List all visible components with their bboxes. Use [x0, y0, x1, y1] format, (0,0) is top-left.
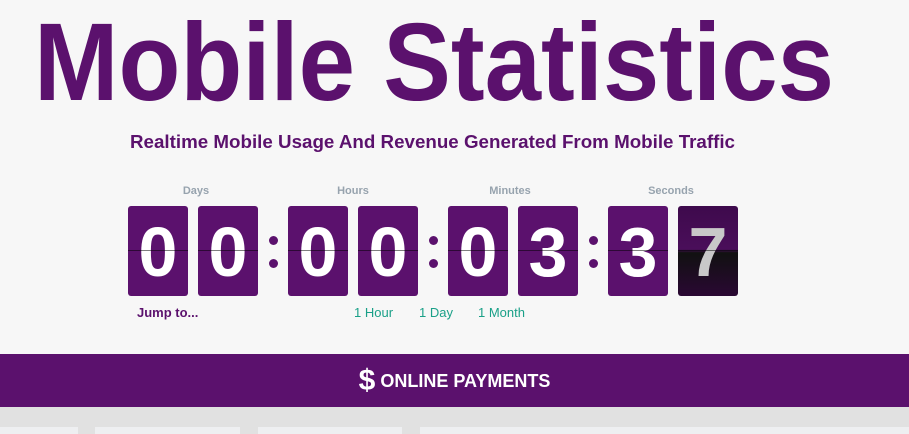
title: Mobile Statistics	[34, 1, 834, 124]
digit cards: 3	[619, 213, 657, 291]
label: seconds: Seconds	[648, 185, 694, 197]
jump links: 1 Month	[478, 305, 525, 320]
digit cards: 0	[459, 213, 497, 291]
jump links	[137, 305, 525, 320]
digit cards: 0	[139, 213, 177, 291]
digit cards: 0	[209, 213, 247, 291]
digit cards: 3	[529, 213, 567, 291]
banner: online payments	[0, 354, 909, 407]
subtitle: Realtime Mobile Usage And Revenue Generated From Mobile Traffic	[130, 132, 735, 152]
banner: online payments: $ ONLINE PAYMENTS	[359, 364, 550, 397]
digit cards: 0	[369, 213, 407, 291]
label: days: Days	[183, 185, 209, 197]
label: minutes: Minutes	[489, 185, 531, 197]
countdown	[128, 185, 738, 320]
digit cards: 0	[299, 213, 337, 291]
cards area	[0, 407, 909, 434]
digit cards: 7	[689, 213, 727, 291]
jump links: 1 Day	[419, 305, 453, 320]
jump links: 1 Hour	[354, 305, 393, 320]
digit cards	[128, 206, 738, 296]
label: hours: Hours	[337, 185, 369, 197]
jump links: Jump to...	[137, 305, 198, 320]
